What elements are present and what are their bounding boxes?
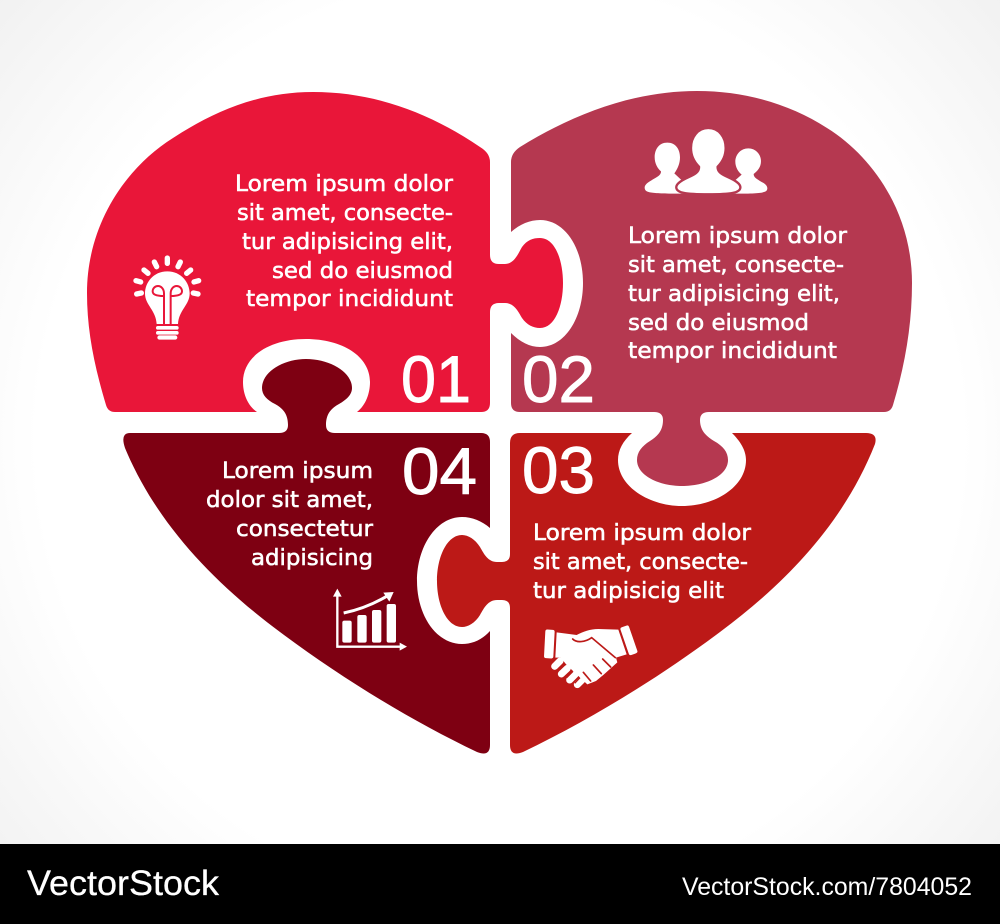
footer brand: VectorStock <box>27 864 220 903</box>
text: piece 02: sed do eiusmod <box>628 311 809 336</box>
icon: handshake <box>544 625 638 685</box>
text: piece 01: sit amet, consecte- <box>237 201 453 226</box>
piece 01 shape <box>87 92 563 412</box>
icon: light bulb <box>136 258 199 340</box>
piece 02 shape <box>511 91 912 486</box>
piece 04 shape <box>123 359 490 753</box>
text: piece 04: adipisicing <box>251 546 373 571</box>
panel: piece 02 <box>511 91 912 486</box>
number 04: 04 <box>402 434 477 508</box>
panel: piece 03 <box>437 433 876 753</box>
text: piece 01 <box>235 172 454 312</box>
text: piece 01: tur adipisicing elit, <box>242 230 453 255</box>
text: piece 02: sit amet, consecte- <box>628 253 844 278</box>
text: piece 02: tempor incididunt <box>628 339 837 364</box>
text: piece 04: consectetur <box>236 517 374 542</box>
text: piece 03 <box>533 521 752 604</box>
panel: piece 01 <box>87 92 563 416</box>
footer bar <box>0 844 1000 924</box>
text: piece 03: Lorem ipsum dolor <box>533 521 752 546</box>
number 03: 03 <box>522 433 595 507</box>
icon: people <box>645 128 767 194</box>
text: piece 01: Lorem ipsum dolor <box>235 172 454 197</box>
text: piece 03: sit amet, consecte- <box>533 550 748 575</box>
text: piece 02: tur adipisicing elit, <box>628 282 840 307</box>
piece 03 shape <box>437 433 876 753</box>
text: piece 04: dolor sit amet, <box>206 488 373 513</box>
text: piece 02: Lorem ipsum dolor <box>628 224 848 249</box>
text: piece 03: tur adipisicig elit <box>533 579 724 604</box>
text: piece 04 <box>206 459 374 571</box>
footer url: VectorStock.com/7804052 <box>682 873 972 901</box>
icon: bar chart <box>333 589 407 651</box>
text: piece 04: Lorem ipsum <box>222 459 373 484</box>
number 02: 02 <box>522 342 595 416</box>
number 01: 01 <box>401 342 471 416</box>
text: piece 02 <box>628 224 848 364</box>
panel: piece 04 <box>123 359 490 753</box>
text: piece 01: sed do eiusmod <box>272 259 453 284</box>
text: piece 01: tempor incididunt <box>246 287 453 312</box>
